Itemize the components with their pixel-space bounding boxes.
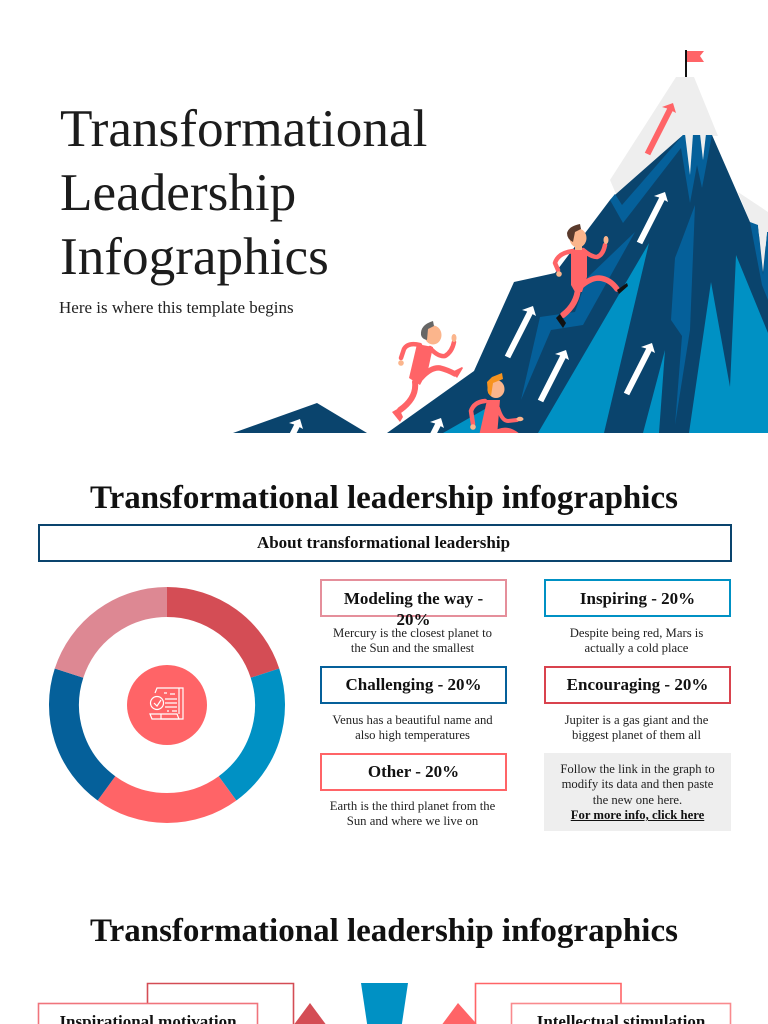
heading two: Transformational leadership infographics xyxy=(90,913,678,949)
banner: about transformational leadership xyxy=(38,524,732,562)
description: Venus has a beautiful name and xyxy=(332,713,493,727)
light blue faces xyxy=(443,243,768,433)
right back box xyxy=(476,984,621,1024)
card: encouraging: Encouraging - 20% xyxy=(567,675,708,694)
title: Infographics xyxy=(60,227,329,286)
title: Transformational xyxy=(60,99,427,158)
snow drips xyxy=(685,134,768,272)
heading one: Transformational leadership infographics xyxy=(90,480,678,516)
centre blue trapezoid xyxy=(361,983,408,1024)
description: biggest planet of them all xyxy=(572,728,701,742)
white arrows xyxy=(413,192,668,470)
medium blue ridges xyxy=(521,135,768,425)
description: the Sun and the smallest xyxy=(351,641,474,655)
card: inspiring: Inspiring - 20% xyxy=(580,589,695,608)
centre circle icon xyxy=(127,665,207,745)
red arrow xyxy=(645,103,676,155)
snow caps xyxy=(610,77,768,240)
climber lower xyxy=(470,373,524,436)
left triangle xyxy=(290,1003,330,1024)
title xyxy=(60,99,427,286)
card: other: Other - 20% xyxy=(368,762,459,781)
left front box xyxy=(38,1004,258,1024)
description: Sun and where we live on xyxy=(347,814,478,828)
description: Mercury is the closest planet to xyxy=(333,626,492,640)
card: other xyxy=(320,753,507,828)
right triangle xyxy=(438,1003,482,1024)
card: challenging xyxy=(320,666,507,742)
note box: For more info, click here xyxy=(571,808,704,822)
donut chart xyxy=(49,587,285,823)
description: Earth is the third planet from the xyxy=(330,799,495,813)
segments xyxy=(64,602,270,808)
description xyxy=(564,713,708,742)
description xyxy=(332,713,493,742)
description xyxy=(570,626,703,655)
small mountain xyxy=(233,403,367,471)
illustration: mountain with climbers xyxy=(233,50,768,433)
title: Leadership xyxy=(60,163,296,222)
left back box xyxy=(148,984,294,1024)
right front box xyxy=(512,1004,730,1024)
description: also high temperatures xyxy=(355,728,470,742)
description xyxy=(333,626,492,655)
card: modeling the way xyxy=(320,579,507,655)
description: Jupiter is a gas giant and the xyxy=(565,713,708,727)
bottom diagram xyxy=(38,982,732,1024)
card: encouraging xyxy=(544,666,731,742)
note box xyxy=(544,753,731,831)
note box: modify its data and then paste xyxy=(562,777,713,791)
flag xyxy=(686,50,704,77)
card: modeling the way: Modeling the way - 20% xyxy=(344,589,483,629)
description: actually a cold place xyxy=(585,641,688,655)
card: challenging: Challenging - 20% xyxy=(345,675,482,694)
subtitle: Here is where this template begins xyxy=(59,298,294,317)
climber middle xyxy=(392,321,463,422)
description: Despite being red, Mars is xyxy=(570,626,703,640)
banner: about transformational leadership: About transformational leadership xyxy=(257,533,510,552)
note box: Follow the link in the graph to xyxy=(560,762,715,776)
note box: the new one here. xyxy=(593,793,682,807)
description xyxy=(330,799,495,828)
climber upper xyxy=(555,224,628,328)
main mountain body xyxy=(387,135,768,433)
card: inspiring xyxy=(544,579,731,655)
